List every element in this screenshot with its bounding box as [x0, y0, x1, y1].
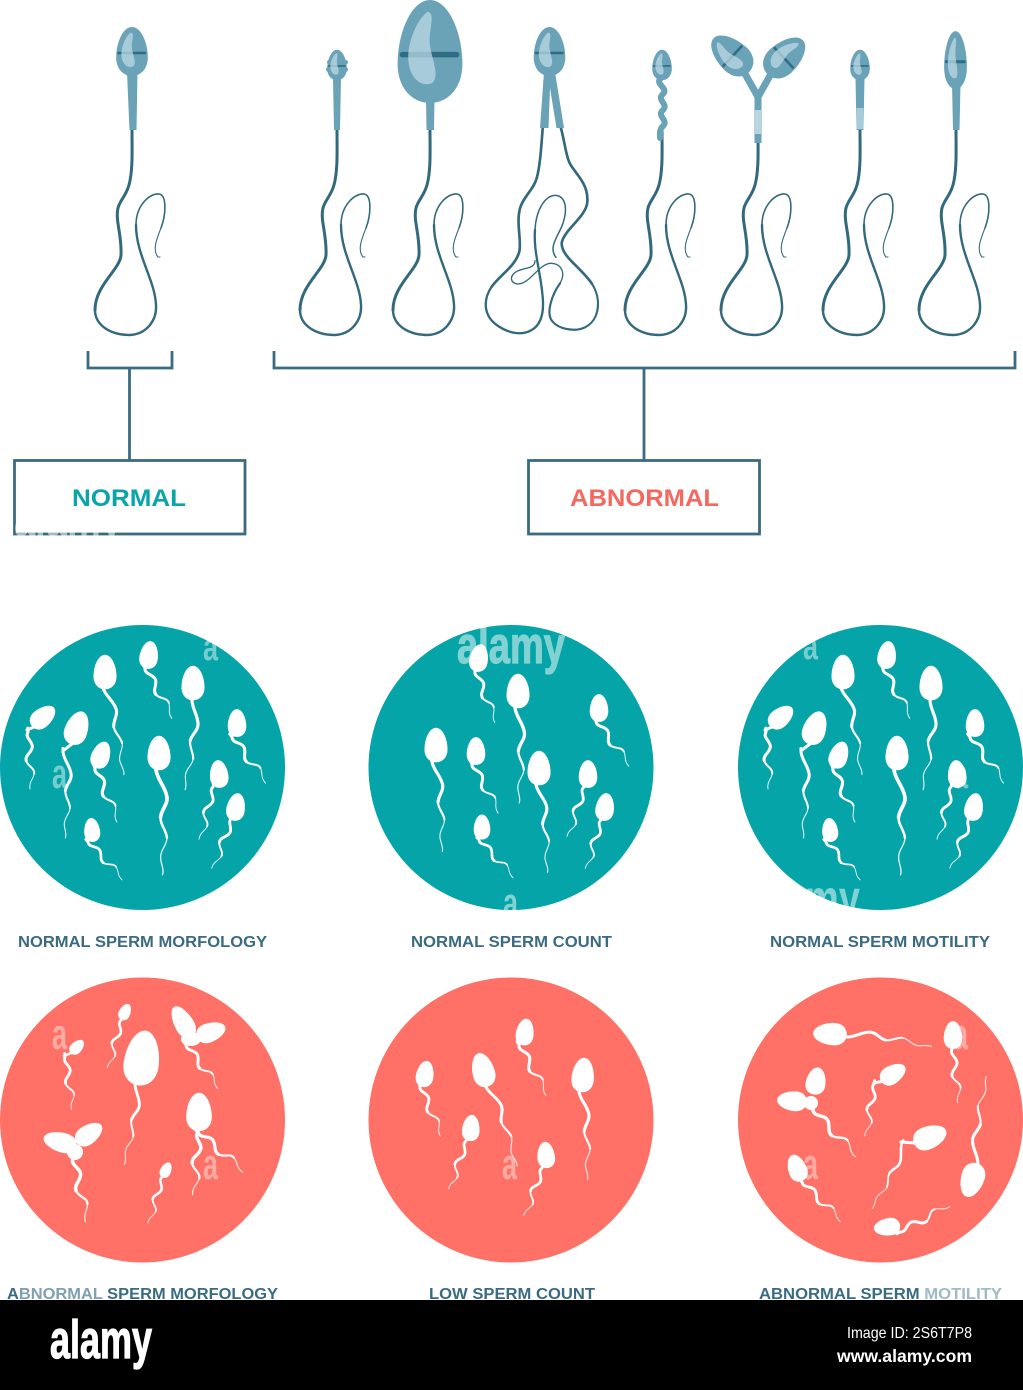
normal sperm illustration	[95, 27, 165, 335]
watermark: a	[203, 1140, 218, 1189]
panel: abnormal sperm morfology	[0, 978, 285, 1262]
sperm	[468, 1050, 524, 1166]
sperm	[590, 694, 633, 768]
label box: abnormal: ABNORMAL	[570, 485, 719, 512]
watermark: alamy	[457, 617, 565, 675]
abnormal sperm: two heads	[703, 27, 814, 335]
sperm	[467, 737, 502, 815]
footer bar	[0, 1300, 1023, 1390]
sperm	[414, 1059, 444, 1137]
footer logo: alamy	[50, 1310, 152, 1370]
label box: abnormal	[528, 460, 760, 534]
sperm	[60, 708, 94, 838]
panel: normal sperm count	[368, 617, 654, 926]
sperm	[105, 1002, 134, 1069]
watermark: a	[803, 626, 819, 668]
sperm	[514, 1017, 550, 1097]
abnormal sperm: coiled midpiece	[625, 50, 695, 335]
sperm	[88, 739, 121, 823]
caption: abnormal sperm motility: ABNORMAL SPERM MOTILITY	[759, 1286, 1003, 1303]
sperm group	[25, 640, 269, 882]
abnormal sperm: double tail	[486, 27, 598, 333]
abnormal sperm: narrow elongated head	[919, 31, 989, 335]
label box: normal	[14, 460, 245, 548]
panel: normal sperm morfology	[0, 625, 285, 910]
large-head sperm	[121, 1028, 163, 1165]
panel: normal sperm motility	[738, 625, 1023, 928]
bracket: abnormal	[274, 351, 1015, 460]
watermark: a	[52, 750, 67, 797]
caption: low sperm count: LOW SPERM COUNT	[429, 1286, 596, 1303]
sperm	[506, 674, 530, 803]
sperm	[146, 1160, 174, 1224]
sperm	[872, 1120, 950, 1211]
sperm group	[763, 640, 1007, 882]
sperm	[467, 643, 499, 724]
sperm	[474, 815, 516, 880]
sperm	[147, 736, 171, 875]
sperm	[446, 1114, 481, 1190]
panel: abnormal sperm motility	[738, 978, 1023, 1262]
watermark: a	[953, 750, 968, 797]
sperm	[521, 1141, 556, 1217]
label box: normal: NORMAL	[72, 485, 186, 512]
caption: normal sperm motility: NORMAL SPERM MOTILITY	[770, 934, 991, 951]
watermark: a	[502, 1140, 517, 1189]
watermark: alamy	[752, 870, 860, 928]
caption: normal sperm count: NORMAL SPERM COUNT	[411, 934, 613, 951]
two-headed sperm	[776, 1066, 859, 1159]
sperm	[196, 759, 229, 840]
abnormal sperm: small ridged head	[300, 50, 370, 335]
bracket: normal	[88, 351, 172, 460]
sperm	[583, 792, 616, 870]
sperm	[93, 655, 131, 775]
sperm	[83, 817, 125, 882]
sperm	[227, 709, 269, 785]
sperm	[62, 1037, 87, 1110]
sperm	[570, 1057, 596, 1180]
watermark: a	[803, 1140, 818, 1189]
two-headed sperm	[41, 1117, 107, 1223]
sperm	[955, 1076, 989, 1200]
sperm	[862, 1059, 910, 1137]
watermark: a	[52, 1010, 67, 1059]
sperm	[944, 1021, 962, 1103]
two-headed sperm	[166, 1002, 228, 1090]
sperm	[527, 751, 555, 872]
panel: low sperm count	[368, 978, 654, 1262]
two-tailed sperm	[186, 1093, 246, 1195]
watermark: a	[953, 1010, 968, 1059]
caption: abnormal sperm morfology: ABNORMAL SPERM MORFOLOGY	[7, 1286, 279, 1303]
watermark: alamy	[14, 490, 122, 548]
watermark: a	[203, 627, 219, 669]
sperm	[424, 728, 450, 852]
abnormal sperm: giant head	[393, 0, 463, 335]
sperm	[873, 1202, 951, 1238]
sperm	[181, 666, 205, 790]
caption: normal sperm morfology: NORMAL SPERM MORFOLOGY	[18, 934, 268, 951]
sperm	[25, 700, 60, 789]
abnormal sperm: thin midpiece	[823, 50, 893, 335]
sperm	[784, 1152, 844, 1224]
footer url: www.alamy.com	[836, 1346, 972, 1366]
sperm	[209, 792, 248, 870]
sperm	[564, 760, 597, 838]
watermark: a	[503, 879, 518, 926]
sperm	[138, 640, 176, 720]
sperm	[813, 1022, 932, 1047]
footer image id: Image ID: 2S6T7P8	[847, 1325, 972, 1342]
